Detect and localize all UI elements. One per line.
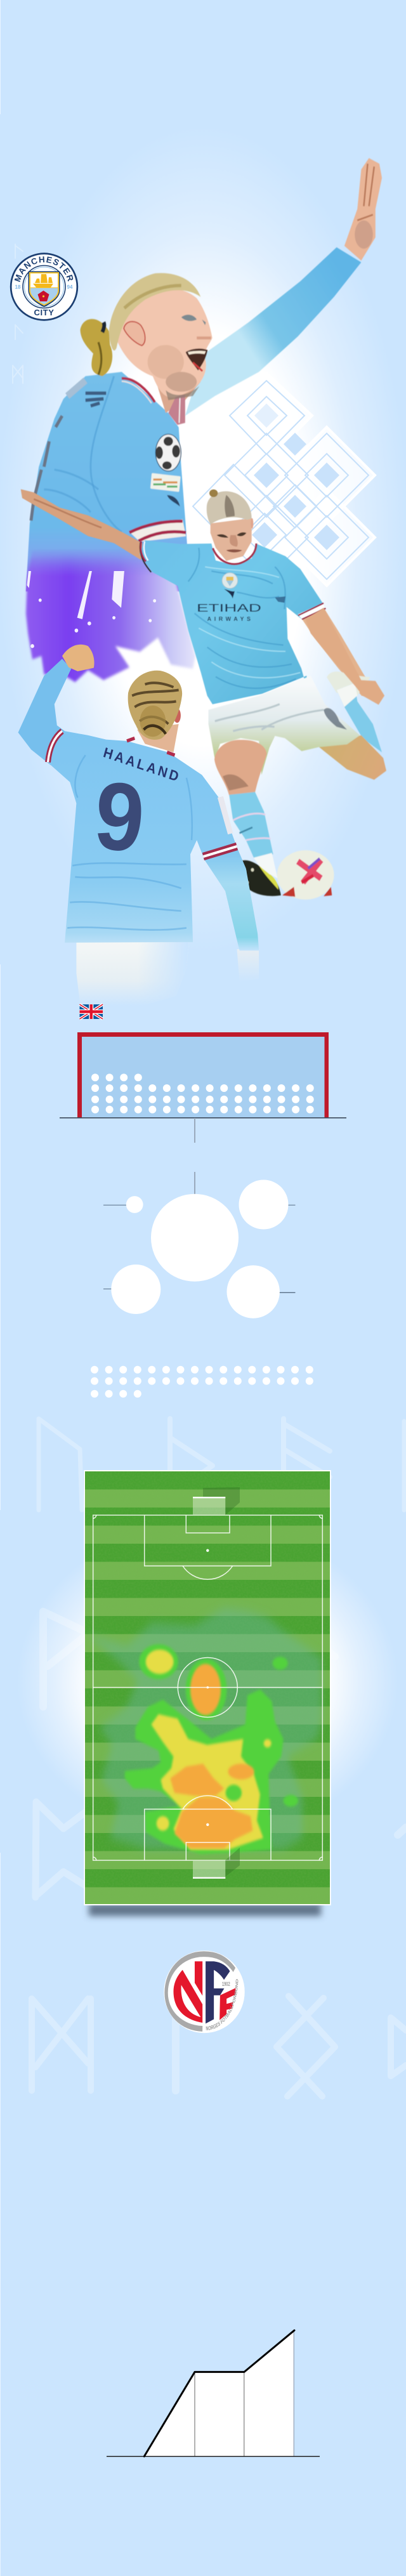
goal with goal-dot tally xyxy=(60,1032,346,1119)
neck and ear xyxy=(127,708,181,755)
league sleeve badge xyxy=(218,796,233,834)
area chart xyxy=(107,2330,320,2457)
hair xyxy=(128,671,182,740)
raised left arm xyxy=(18,659,71,765)
crest city label: CITY xyxy=(34,308,55,317)
right hand xyxy=(306,608,384,705)
hair with bun xyxy=(207,489,252,525)
raised hand xyxy=(344,158,382,261)
cuffs xyxy=(48,731,237,857)
crest founding year left: 18 xyxy=(15,284,21,290)
shirt folds xyxy=(188,548,296,688)
pitch markings xyxy=(93,1515,322,1860)
back thigh xyxy=(318,735,386,780)
back of jersey xyxy=(49,731,237,943)
paint flecks xyxy=(27,571,156,648)
trailing boot and sock xyxy=(327,671,382,752)
sponsor wordmark xyxy=(197,601,261,622)
jersey folds xyxy=(44,376,122,532)
collar xyxy=(213,544,256,564)
sponsor wordmark: ETIHAD xyxy=(197,601,261,614)
federation name: NORGES FOTBALLFORBUND xyxy=(206,1979,239,2030)
player: back view with name and number xyxy=(18,645,259,1006)
player: kicking (middle), upper body xyxy=(21,489,376,704)
front thigh xyxy=(214,740,266,796)
connector below goal xyxy=(194,1118,195,1143)
Puma logo xyxy=(224,589,235,598)
front sock xyxy=(229,792,273,858)
sleeve cuff xyxy=(129,519,186,542)
knot emblem behind the players xyxy=(187,373,375,586)
background runes xyxy=(13,244,406,2096)
crest wordmark: MANCHESTER xyxy=(14,256,74,282)
crest founding year right: 94 xyxy=(67,284,73,290)
goal dots xyxy=(91,1074,314,1114)
bottom goal xyxy=(193,1848,240,1879)
extended arm xyxy=(21,489,142,560)
collar xyxy=(122,378,185,425)
player: kicking (middle), lower body xyxy=(209,608,386,900)
bare right arm xyxy=(303,609,376,696)
torso in jersey xyxy=(26,372,190,591)
pitch shadow xyxy=(89,1903,321,1916)
left cuff xyxy=(140,541,151,572)
shorts xyxy=(76,942,259,1006)
purple paint splash xyxy=(26,540,195,682)
penalty and centre spots xyxy=(206,1549,209,1826)
face xyxy=(211,518,253,561)
back name remnants xyxy=(31,381,106,521)
crest shield xyxy=(28,272,60,307)
hair xyxy=(81,273,200,376)
shirt shadow mark xyxy=(275,596,285,603)
No Room For Racism patch xyxy=(150,473,181,492)
right cuff xyxy=(298,603,325,620)
Norwegian FA crest xyxy=(164,1950,245,2033)
sponsor wordmark: AIRWAYS xyxy=(207,615,251,622)
flag: United Kingdom xyxy=(80,1004,103,1019)
head and face xyxy=(115,287,213,400)
bubble chart xyxy=(103,1172,296,1318)
club badge on shirt xyxy=(222,573,238,588)
shorts badge xyxy=(324,708,347,730)
assist dot tally xyxy=(91,1366,313,1398)
goal line xyxy=(60,1117,346,1119)
player: raised-arm celebration (top) xyxy=(26,158,382,591)
heat map pitch xyxy=(84,1470,331,1905)
top goal xyxy=(193,1487,240,1515)
football xyxy=(277,850,334,900)
founding year: 1902 xyxy=(222,1980,230,1987)
neck xyxy=(153,371,200,413)
fist xyxy=(62,645,95,671)
striking boot xyxy=(237,860,281,896)
white sock over boot xyxy=(254,853,278,878)
heat zones xyxy=(87,1608,322,1854)
ear xyxy=(124,322,145,346)
raised sleeve xyxy=(185,247,361,416)
Manchester City crest xyxy=(10,253,79,321)
jersey ripples xyxy=(67,755,192,930)
shirt xyxy=(140,541,325,704)
shirt number: 9 xyxy=(91,760,148,872)
right sleeve and arm xyxy=(204,847,259,950)
Puma mark xyxy=(167,495,180,506)
Champions League sleeve badge xyxy=(155,434,181,471)
shorts folds xyxy=(215,704,324,731)
player name on shirt: HAALAND xyxy=(102,744,183,785)
shorts xyxy=(209,676,360,775)
